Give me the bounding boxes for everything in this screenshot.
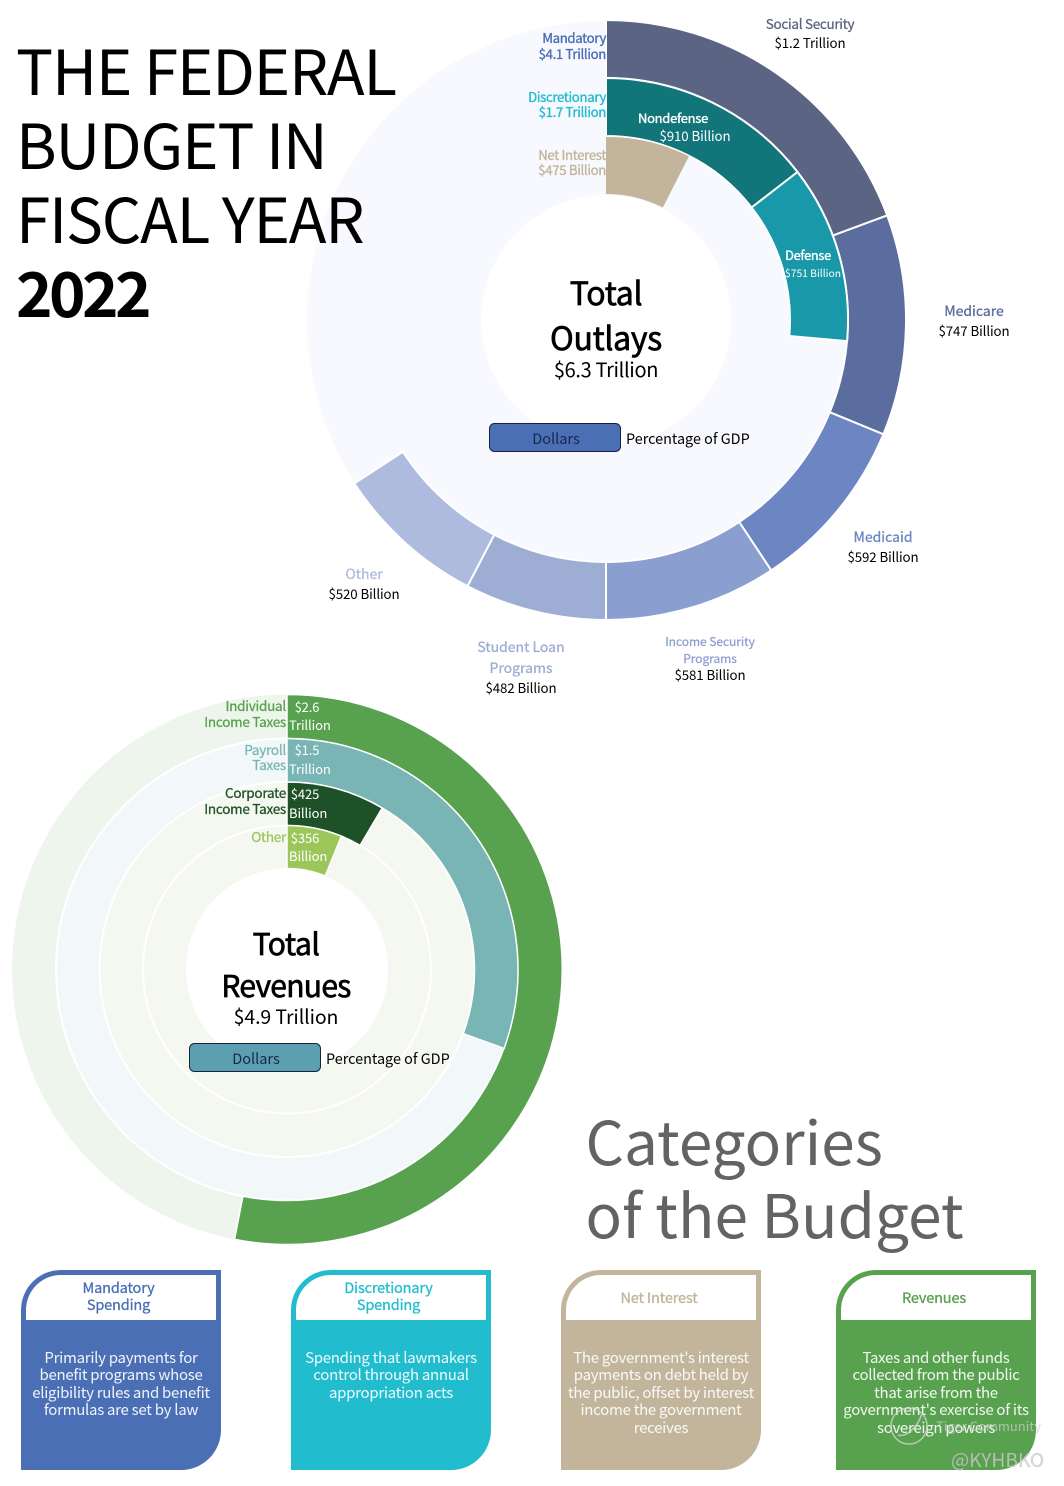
other value xyxy=(289,828,327,865)
defense label xyxy=(785,245,841,280)
social security label xyxy=(766,13,854,52)
description: eligibility rules and benefit xyxy=(32,1382,210,1403)
description xyxy=(843,1347,1029,1438)
center total: $4.9 Trillion xyxy=(234,1001,338,1030)
title: BUDGET IN xyxy=(16,97,327,187)
corporate income taxes label: Income Taxes xyxy=(204,798,286,818)
net interest label: $475 Billion xyxy=(538,160,606,179)
nondefense label: $910 Billion xyxy=(659,126,731,145)
toggle: dollars / percentage of GDP: Dollars xyxy=(532,428,580,449)
toggle: dollars / percentage of GDP xyxy=(190,1044,450,1072)
description: government's exercise of its xyxy=(843,1399,1029,1420)
description: Taxes and other funds xyxy=(863,1347,1010,1368)
description: the public, offset by interest xyxy=(568,1382,755,1403)
social security label: $1.2 Trillion xyxy=(775,33,845,52)
net interest label: Net Interest xyxy=(538,145,606,164)
individual value xyxy=(289,697,331,734)
segment: student loans xyxy=(468,535,606,620)
description: collected from the public xyxy=(852,1364,1020,1385)
mandatory label: $4.1 Trillion xyxy=(539,44,606,63)
segment: income security xyxy=(606,522,771,620)
watermark xyxy=(891,1408,1044,1473)
center total: Outlays xyxy=(550,314,662,360)
center total: Total xyxy=(570,269,642,315)
description: income the government xyxy=(580,1399,742,1420)
toggle: dollars / percentage of GDP: Dollars xyxy=(232,1048,280,1069)
medicaid label: $592 Billion xyxy=(847,547,919,566)
description: Spending that lawmakers xyxy=(305,1347,477,1368)
income security label: Programs xyxy=(683,650,737,667)
other label xyxy=(328,564,400,603)
nondefense label: Nondefense xyxy=(638,108,708,127)
net interest label xyxy=(538,145,606,179)
description: appropriation acts xyxy=(329,1382,453,1403)
corporate value: $425 xyxy=(291,784,319,803)
watermark: Tiger Community xyxy=(936,1416,1041,1435)
chart background rings xyxy=(12,694,562,1244)
individual value: Trillion xyxy=(289,715,331,734)
chart: total revenues donut xyxy=(12,694,562,1244)
discretionary ring segments xyxy=(606,78,848,341)
description xyxy=(568,1347,755,1438)
chart background rings xyxy=(307,21,905,619)
description xyxy=(32,1347,210,1420)
medicaid label: Medicaid xyxy=(853,527,913,547)
corporate income taxes label: Corporate xyxy=(225,782,286,802)
student loan label: $482 Billion xyxy=(485,678,557,697)
card: discretionary spending xyxy=(291,1270,491,1470)
center total: $6.3 Trillion xyxy=(554,354,658,383)
payroll taxes label: Payroll xyxy=(244,739,286,759)
title: 2022 xyxy=(16,245,149,335)
segment: medicare xyxy=(830,215,906,434)
segment: nondefense xyxy=(606,78,798,208)
payroll value: Trillion xyxy=(289,759,331,778)
toggle: dollars / percentage of GDP: Percentage of GDP xyxy=(626,428,750,449)
card: mandatory spending: Mandatory xyxy=(82,1277,155,1298)
heading: categories of the budget: of the Budget xyxy=(586,1169,964,1256)
corporate income taxes label xyxy=(204,782,286,818)
description: payments on debt held by xyxy=(574,1364,749,1385)
other value: $356 xyxy=(291,828,319,847)
toggle: dollars / percentage of GDP xyxy=(490,424,750,452)
medicaid label xyxy=(847,527,919,566)
student loan label: Student Loan xyxy=(477,637,565,657)
chart: total outlays donut xyxy=(307,13,1010,697)
segment: other revenues xyxy=(287,826,341,876)
individual income taxes label: Individual xyxy=(225,695,286,715)
description: Primarily payments for xyxy=(44,1347,198,1368)
description: formulas are set by law xyxy=(44,1399,198,1420)
center total: Revenues xyxy=(221,962,351,1006)
description: The government's interest xyxy=(573,1347,749,1368)
segment: other mandatory xyxy=(354,452,494,586)
description xyxy=(305,1347,477,1403)
card: mandatory spending xyxy=(21,1270,221,1470)
discretionary label xyxy=(528,87,606,121)
description: that arise from the xyxy=(874,1382,998,1403)
payroll value: $1.5 xyxy=(295,740,319,759)
student loan label: Programs xyxy=(490,658,553,678)
segment: defense xyxy=(752,172,848,341)
payroll taxes label xyxy=(244,739,286,774)
segment: net interest xyxy=(606,137,689,208)
heading: categories of the budget xyxy=(586,1096,964,1256)
toggle: dollars / percentage of GDP: Percentage of GDP xyxy=(326,1048,450,1069)
card: net interest xyxy=(561,1270,761,1470)
corporate value xyxy=(289,784,327,822)
title: FISCAL YEAR xyxy=(16,171,363,261)
heading: categories of the budget: Categories xyxy=(586,1096,883,1183)
discretionary label: Discretionary xyxy=(528,87,606,106)
medicare label: $747 Billion xyxy=(938,321,1010,340)
description: benefit programs whose xyxy=(39,1364,203,1385)
individual value: $2.6 xyxy=(295,697,319,716)
individual income taxes label: Income Taxes xyxy=(204,711,286,731)
discretionary label: $1.7 Trillion xyxy=(539,102,606,121)
center total xyxy=(550,269,662,383)
payroll taxes label: Taxes xyxy=(252,754,286,774)
title: THE FEDERAL xyxy=(16,23,396,113)
segment: individual income taxes xyxy=(234,694,562,1244)
description: sovereign powers xyxy=(877,1417,995,1438)
other label: Other xyxy=(345,564,383,584)
medicare label xyxy=(938,301,1010,340)
card: discretionary spending: Discretionary xyxy=(344,1277,433,1298)
other label: $520 Billion xyxy=(328,584,400,603)
center total xyxy=(221,920,351,1030)
income security label xyxy=(665,633,756,684)
medicare label: Medicare xyxy=(944,301,1004,321)
title xyxy=(16,23,396,335)
description: control through annual xyxy=(313,1364,469,1385)
description: receives xyxy=(634,1417,689,1438)
segment: medicaid xyxy=(739,412,883,570)
income security label: Income Security xyxy=(665,633,756,650)
mandatory label: Mandatory xyxy=(542,28,606,47)
individual income taxes label xyxy=(204,695,286,731)
income security label: $581 Billion xyxy=(674,665,746,684)
segment: social security xyxy=(606,20,887,236)
mandatory ring segments xyxy=(354,20,906,620)
card: net interest: Net Interest xyxy=(620,1287,698,1308)
student loan label xyxy=(477,637,565,697)
segment: payroll taxes xyxy=(287,738,518,1048)
watermark: @KYHBKO xyxy=(951,1445,1044,1473)
corporate value: Billion xyxy=(289,803,327,822)
segment: corporate income taxes xyxy=(287,782,382,845)
icon: watermark logo xyxy=(891,1408,927,1444)
other label: Other xyxy=(251,826,287,846)
card: revenues xyxy=(836,1270,1036,1470)
card: revenues: Revenues xyxy=(902,1287,966,1308)
center total: Total xyxy=(253,920,319,964)
other value: Billion xyxy=(289,846,327,865)
nondefense label xyxy=(638,108,731,145)
payroll value xyxy=(289,740,331,778)
card: discretionary spending: Spending xyxy=(357,1294,420,1315)
mandatory label xyxy=(539,28,606,63)
card: mandatory spending: Spending xyxy=(87,1294,150,1315)
defense label: $751 Billion xyxy=(785,265,841,280)
defense label: Defense xyxy=(785,245,831,264)
social security label: Social Security xyxy=(766,13,854,33)
